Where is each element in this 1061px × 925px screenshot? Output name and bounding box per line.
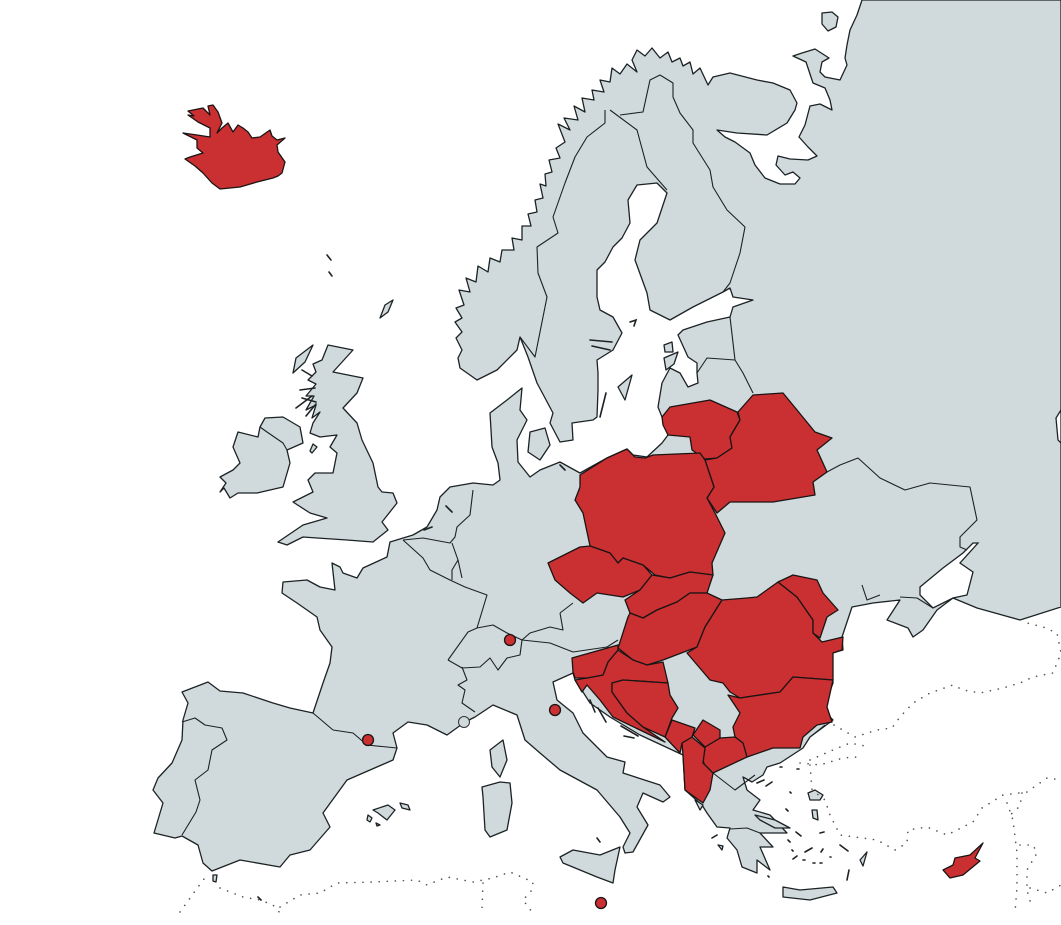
Sea of Azov — [920, 543, 978, 608]
Kosovo — [693, 720, 720, 747]
Cyprus — [943, 843, 983, 878]
dotted maritime boundaries — [180, 622, 1061, 913]
Arctic island — [822, 12, 838, 31]
marker: Malta — [596, 898, 606, 908]
North Macedonia — [703, 737, 747, 773]
Romania — [687, 582, 843, 698]
Ireland — [220, 417, 303, 498]
Lithuania — [662, 400, 740, 459]
Croatia — [575, 650, 668, 742]
Montenegro — [665, 720, 695, 753]
marker: Monaco — [458, 716, 470, 728]
marker: Liechtenstein — [504, 634, 516, 646]
Caspian edge — [1056, 410, 1061, 443]
country borders — [182, 75, 977, 835]
Iceland — [183, 105, 285, 189]
marker: San Marino — [550, 704, 560, 716]
Belarus — [705, 393, 832, 513]
Slovenia — [572, 645, 618, 678]
Hungary — [618, 593, 722, 665]
marker: Andorra — [362, 734, 374, 746]
Albania — [682, 737, 713, 803]
Moldova — [778, 575, 838, 638]
Poland — [575, 449, 725, 578]
Bosnia and Herzegovina — [612, 680, 678, 737]
Great Britain — [278, 345, 397, 545]
Northern Ireland border — [260, 427, 287, 450]
Czechia — [548, 546, 652, 603]
small islands — [213, 255, 867, 900]
Slovakia — [625, 572, 713, 618]
Bulgaria — [728, 677, 833, 757]
